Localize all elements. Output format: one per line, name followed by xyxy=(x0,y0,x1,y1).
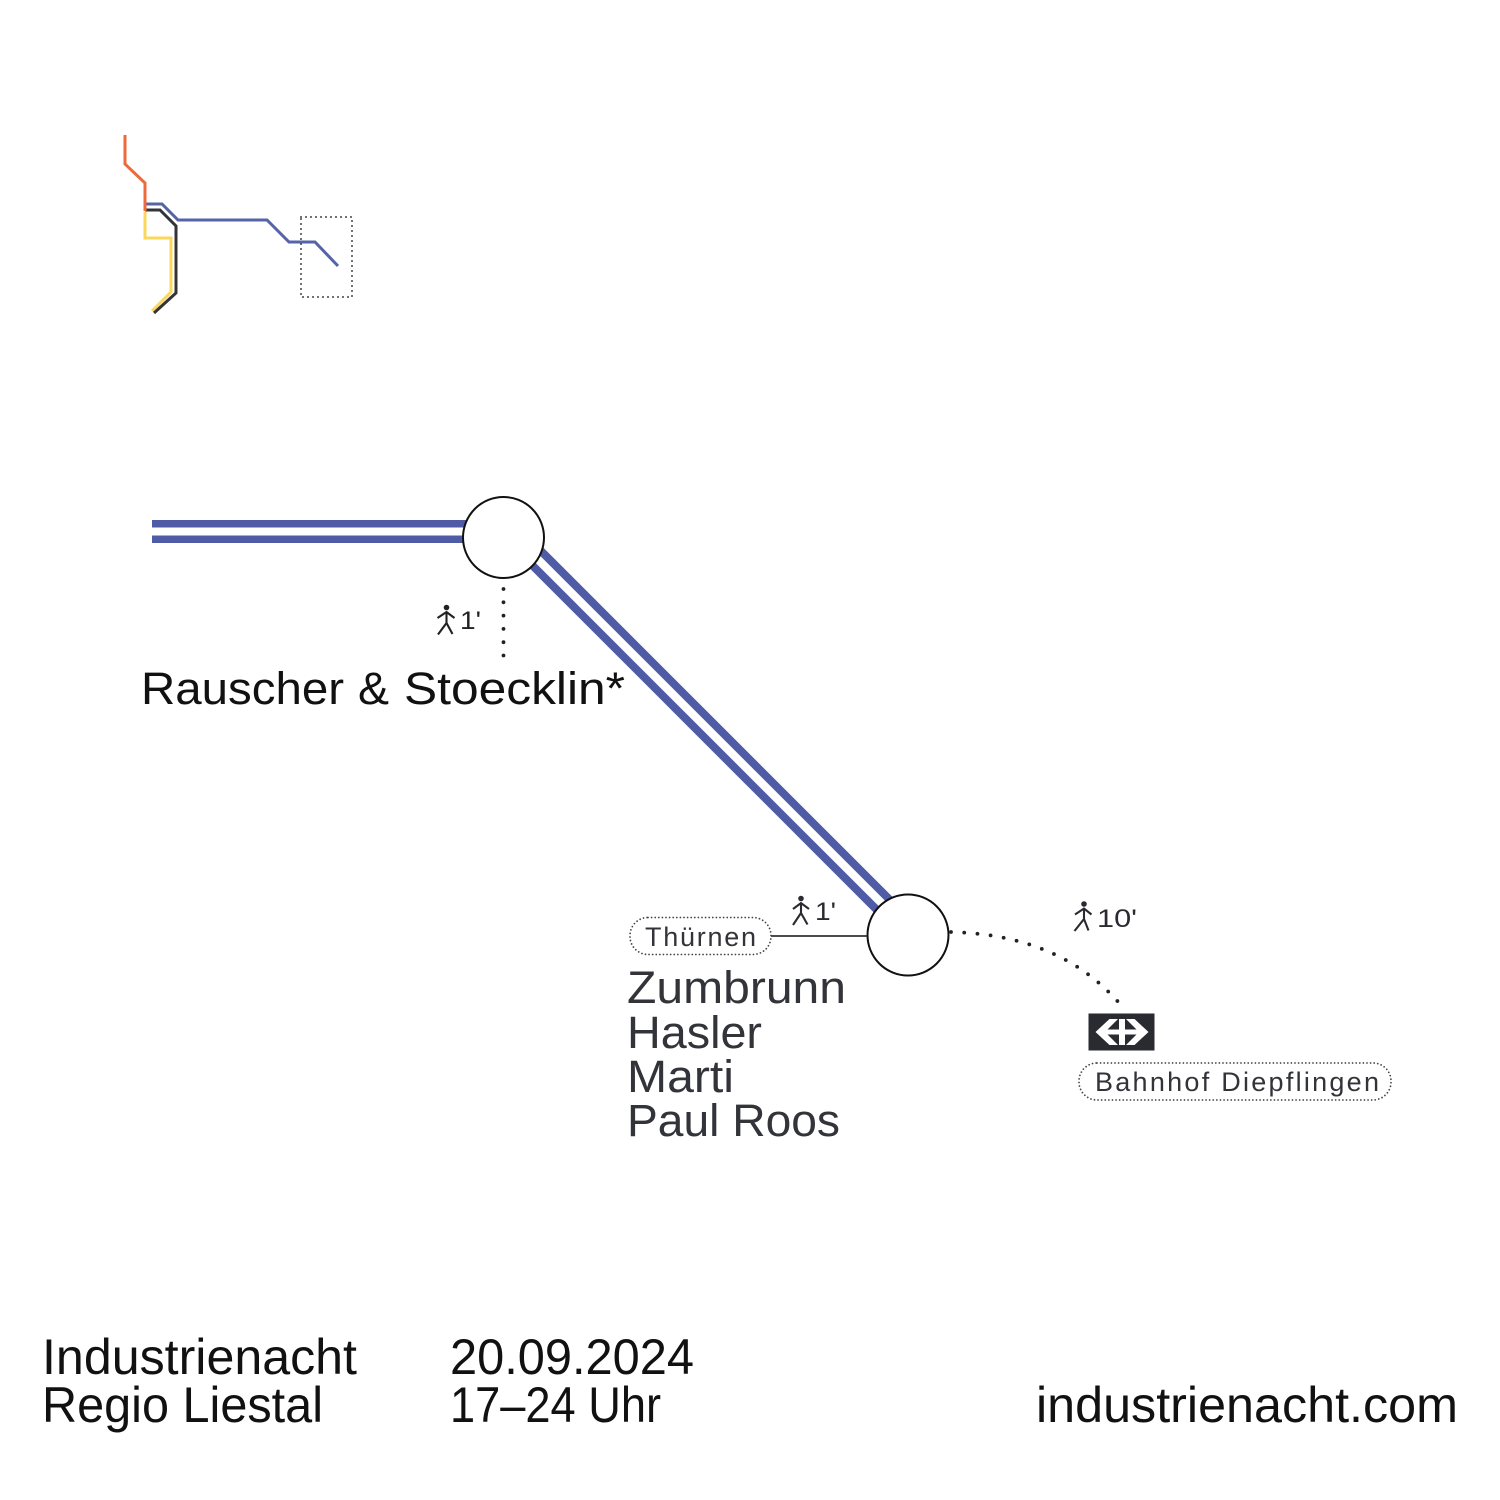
event date and time: 20.09.2024 xyxy=(450,1329,694,1385)
label pill: Thürnen xyxy=(630,918,771,954)
connector line to Thürnen xyxy=(771,935,867,937)
dotted walking path: Rauscher & Stoecklin xyxy=(502,589,505,658)
icon: walking person, 10 minutes xyxy=(1074,901,1092,931)
dotted walking path to station xyxy=(951,932,1120,1004)
overview mini map xyxy=(125,135,352,313)
artist list: Zumbrunn xyxy=(627,962,846,1013)
artist list: Paul Roos xyxy=(627,1095,840,1146)
heading: Rauscher & Stoecklin: & xyxy=(358,663,389,714)
artist list xyxy=(627,962,846,1146)
heading: Rauscher & Stoecklin: Rauscher xyxy=(141,663,344,714)
icon: walking person, 1 minute xyxy=(438,605,454,634)
website: industrienacht.com xyxy=(1036,1377,1458,1433)
station circle: Rauscher & Stoecklin xyxy=(463,497,544,578)
heading: Rauscher & Stoecklin: Stoecklin* xyxy=(404,663,625,714)
blue double line: diagonal section xyxy=(520,540,892,913)
event date and time: 17–24 Uhr xyxy=(450,1377,661,1433)
icon: walking person, Thürnen xyxy=(793,896,809,925)
walking time: 10 minutes: 10' xyxy=(1097,905,1137,933)
walking time: 1 minute: 1' xyxy=(460,607,481,635)
station circle: Thürnen xyxy=(868,894,948,976)
icon: SBB railway logo xyxy=(1088,1014,1154,1050)
event date and time xyxy=(450,1329,694,1433)
artist list: Marti xyxy=(627,1051,734,1102)
blue double line: horizontal section xyxy=(152,520,468,543)
event name: Regio Liestal xyxy=(42,1377,323,1433)
artist list: Hasler xyxy=(627,1007,762,1058)
heading: Rauscher & Stoecklin xyxy=(141,663,625,714)
label pill: Bahnhof Diepflingen: Bahnhof Diepflingen xyxy=(1095,1067,1379,1097)
walking time: Thürnen: 1' xyxy=(815,898,836,926)
event name: Industrienacht xyxy=(42,1329,357,1385)
event name xyxy=(42,1329,357,1433)
label pill: Thürnen: Thürnen xyxy=(645,922,756,952)
